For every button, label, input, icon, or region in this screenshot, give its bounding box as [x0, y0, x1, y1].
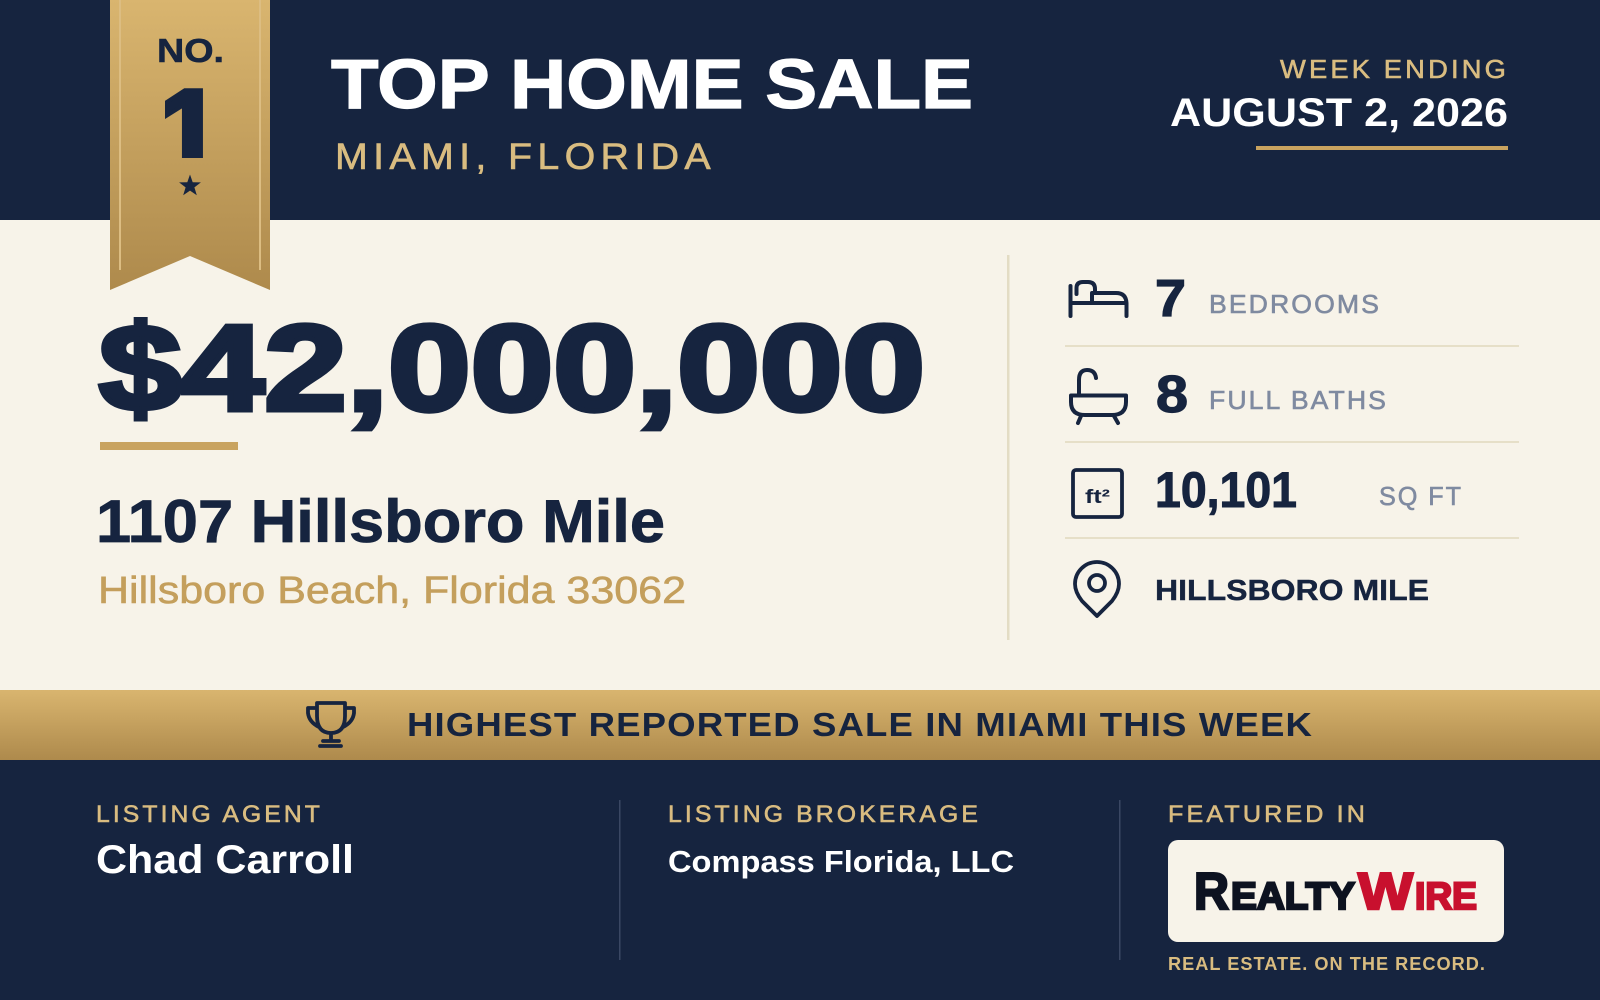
price accent rule: [100, 442, 238, 450]
panel: sale price and address: [96, 300, 925, 612]
logo: Realty: [1194, 863, 1355, 921]
banner text: HIGHEST REPORTED SALE IN MIAMI THIS WEEK: [407, 706, 1313, 743]
street address: 1107 Hillsboro Mile: [96, 488, 665, 555]
footer: [0, 760, 1600, 1000]
stat: bedrooms value: 7: [1155, 270, 1186, 328]
badge number: 1: [155, 65, 224, 203]
logo: Wire: [1358, 863, 1477, 921]
icon: bed: [1070, 282, 1126, 316]
listing brokerage label: LISTING BROKERAGE: [668, 801, 981, 828]
city and zip: Hillsboro Beach, Florida 33062: [98, 570, 686, 612]
title: TOP HOME SALE: [331, 45, 973, 123]
logo: Realty: R: [1194, 863, 1229, 921]
week ending date: AUGUST 2, 2026: [1170, 91, 1508, 135]
icon: location pin: [1075, 562, 1119, 616]
ribbon badge: [110, 0, 270, 290]
stat: bedrooms label: BEDROOMS: [1209, 289, 1381, 319]
stat: neighbourhood: HILLSBORO MILE: [1155, 575, 1429, 607]
subtitle: location: MIAMI, FLORIDA: [335, 136, 716, 177]
header band: [0, 0, 1600, 220]
logo: Realty: EALTY: [1231, 876, 1355, 918]
week ending label: WEEK ENDING: [1280, 54, 1509, 84]
panel: property stats: [1065, 270, 1519, 616]
stat: baths label: FULL BATHS: [1209, 385, 1388, 415]
icon: star: [179, 174, 201, 195]
banner: highest reported sale: [0, 690, 1600, 760]
date underline: [1256, 146, 1508, 150]
stat: square feet value: 10,101: [1155, 462, 1297, 518]
icon: bathtub: [1071, 370, 1126, 423]
badge label: NO.: [157, 32, 224, 69]
stat: square feet label: SQ FT: [1379, 481, 1463, 511]
featured in label: FEATURED IN: [1168, 801, 1368, 828]
listing agent label: LISTING AGENT: [96, 801, 323, 828]
icon: trophy: [308, 703, 354, 746]
icon: square footage: ft²: [1085, 487, 1110, 508]
listing brokerage name: Compass Florida, LLC: [668, 844, 1014, 879]
icon: square footage: [1073, 470, 1122, 517]
stat: baths value: 8: [1156, 366, 1188, 424]
logo: Wire: W: [1358, 863, 1414, 921]
logo: Wire: IRE: [1415, 876, 1477, 918]
tagline: REAL ESTATE. ON THE RECORD.: [1168, 954, 1486, 974]
logo card: [1168, 840, 1504, 942]
listing agent name: Chad Carroll: [96, 838, 354, 882]
sale price: $42,000,000: [99, 300, 925, 436]
